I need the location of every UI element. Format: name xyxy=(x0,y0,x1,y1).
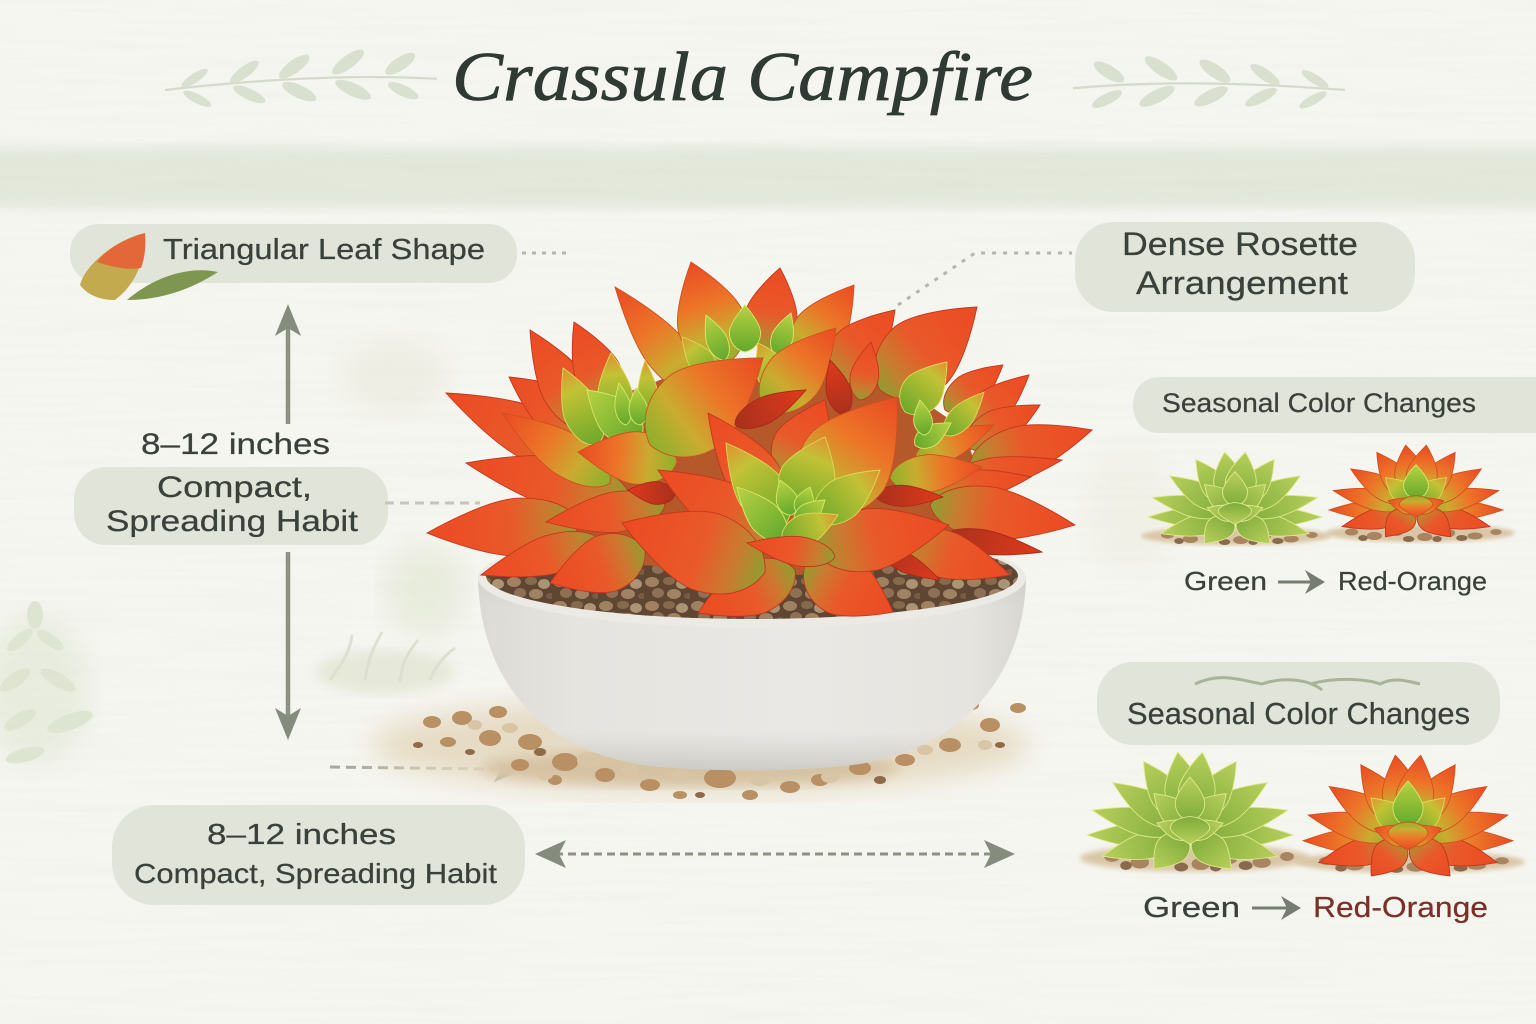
caption: green to red-orange bottom xyxy=(1143,892,1488,924)
plant shadow core xyxy=(555,355,985,575)
label: dense rosette arrangement: Arrangement xyxy=(1136,265,1348,301)
main succulent plant xyxy=(425,251,1099,639)
label: compact spreading habit xyxy=(74,467,388,545)
height arrow down xyxy=(275,552,301,740)
label: bottom size panel: Compact, Spreading Habit xyxy=(134,858,497,889)
title: Crassula Campfire xyxy=(452,39,1033,116)
icon: leaf xyxy=(80,233,218,300)
label: seasonal color changes top: Seasonal Color Changes xyxy=(1162,388,1476,418)
large red rosette xyxy=(1295,753,1525,887)
label: dense rosette arrangement: Dense Rosette xyxy=(1122,226,1358,262)
small green rosette xyxy=(1141,451,1331,552)
decorative sprig left xyxy=(164,43,438,111)
faint background foliage xyxy=(0,337,1175,767)
label: seasonal color changes bottom xyxy=(1097,662,1500,745)
large green rosette xyxy=(1080,750,1310,880)
label: triangular leaf shape: Triangular Leaf Shape xyxy=(163,234,485,266)
caption: green to red-orange top: Red-Orange xyxy=(1338,566,1487,596)
label: compact spreading habit: Compact, xyxy=(157,471,312,504)
width double arrow xyxy=(535,840,1015,868)
caption: green to red-orange top xyxy=(1184,566,1487,596)
label: bottom size panel xyxy=(112,805,525,905)
arrow xyxy=(1252,896,1301,920)
watercolor band xyxy=(0,146,1536,208)
label: seasonal color changes bottom: Seasonal Color Changes xyxy=(1127,696,1470,731)
label: dense rosette arrangement xyxy=(1075,222,1415,312)
decorative sprig right xyxy=(1073,52,1345,111)
label: seasonal color changes top xyxy=(1133,377,1536,433)
label: bottom size panel: 8–12 inches xyxy=(207,819,396,851)
caption: green to red-orange bottom: Green xyxy=(1143,892,1240,924)
caption: green to red-orange top: Green xyxy=(1184,566,1267,596)
pot xyxy=(478,528,1026,770)
dashed connector habit xyxy=(385,502,480,504)
ground gravel under pot xyxy=(370,697,1030,800)
small red rosette xyxy=(1325,444,1515,545)
height value: 8–12 inches xyxy=(141,428,330,461)
label: compact spreading habit: Spreading Habit xyxy=(106,505,359,538)
caption: green to red-orange bottom: Red-Orange xyxy=(1313,892,1488,924)
flourish xyxy=(1195,678,1420,690)
height arrow up xyxy=(275,304,301,424)
dashed arrow to pot xyxy=(330,758,521,782)
arrow xyxy=(1278,570,1325,594)
pot soil xyxy=(478,528,1026,628)
label: triangular leaf shape xyxy=(70,224,517,300)
dotted connector leaf xyxy=(522,252,568,254)
dotted connector rosette xyxy=(898,253,1072,305)
